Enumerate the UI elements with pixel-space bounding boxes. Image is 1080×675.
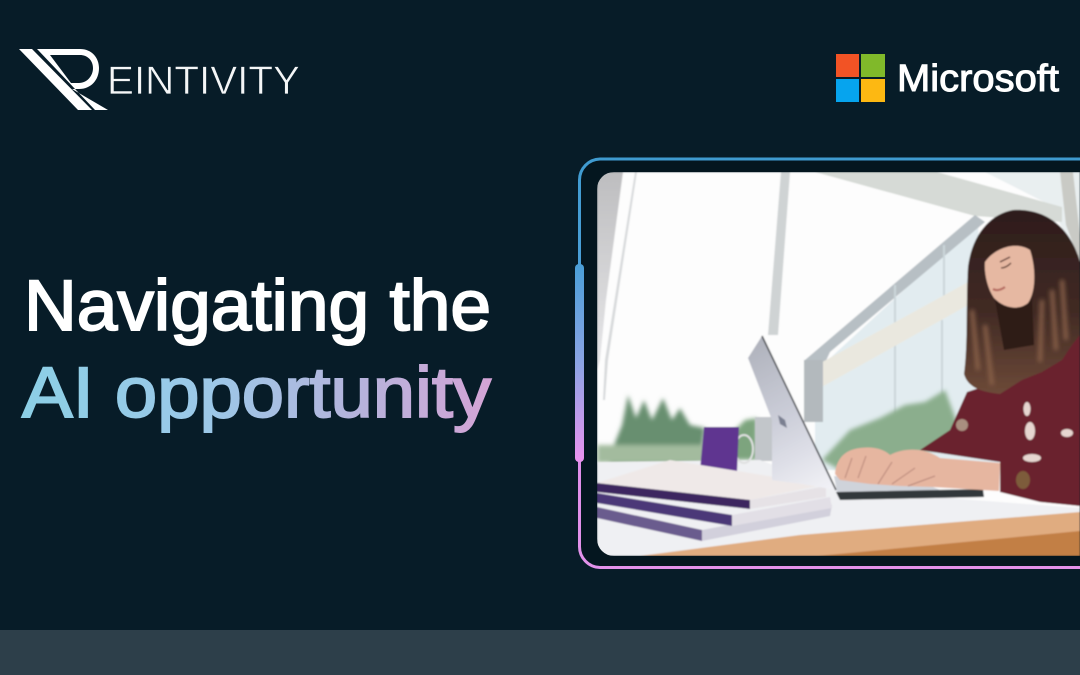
blouse [920,322,1080,506]
frame outline [579,159,1080,568]
upper right column [1060,172,1080,262]
book bottom pages [702,505,832,541]
book middle pages [732,497,832,526]
laptop logo [778,415,787,428]
icon: Microsoft squares [836,54,885,102]
mug body [700,427,739,472]
hair highlights [972,280,1066,385]
logo mark: stripe [19,49,92,110]
building glazing [815,222,1000,470]
lips [993,287,1005,290]
table top [597,460,1080,556]
blouse flowers [956,402,1073,489]
book middle spine [597,493,732,526]
frame inner shade [580,159,1080,567]
table wood light [640,512,1080,556]
building upper beam [805,215,985,378]
mug handle [735,435,753,463]
frame accent bar [575,264,584,462]
building mullions [895,245,944,440]
photo frame [575,159,1080,568]
footer band [0,630,1080,675]
neck shadow [995,296,1034,350]
laptop keyboard deck [834,476,939,493]
title [22,267,492,433]
fingers [845,456,935,486]
logo wordmark: EINTIVITY [107,59,300,103]
thin mullion [603,172,637,400]
book top cover [597,460,823,500]
building column [804,360,823,422]
books [597,460,832,541]
logo: Microsoft [836,54,1059,102]
hair [964,210,1080,394]
rear column [755,417,773,461]
trees right [822,390,958,470]
upper right glazing [987,172,1080,242]
table wood dark [818,531,1080,556]
vertical column [768,172,790,335]
book top spine [597,483,750,509]
logo mark: R [37,49,108,110]
trees left [597,395,757,465]
window sky [597,172,1080,509]
book top pages [750,486,826,509]
photo contents [597,172,1080,556]
Microsoft wordmark: Microsoft [897,58,1059,100]
laptop base [836,489,984,500]
book bottom spine [597,507,702,541]
title line 1: Navigating the [24,267,491,346]
face [985,246,1034,308]
laptop [748,336,984,500]
laptop lid [748,336,836,490]
building concrete band [815,281,970,388]
left wall [597,172,623,370]
mug [700,427,753,472]
eye [1000,257,1011,268]
logo: Reintivity [19,49,300,110]
laptop lid edge [762,336,836,490]
hands and forearm [835,447,1000,491]
top roof beam [815,172,1062,222]
photo: woman working on a laptop [597,172,1080,556]
title line 2: AI opportunity [22,354,492,433]
